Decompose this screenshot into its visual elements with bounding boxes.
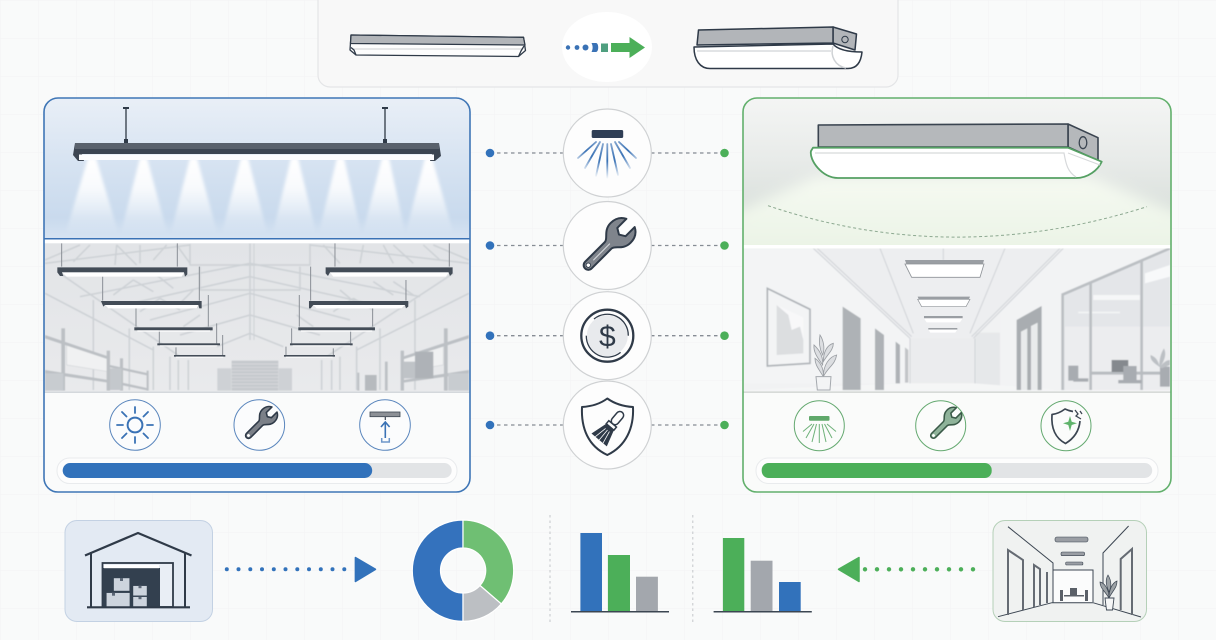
icon: shield with brush bbox=[563, 381, 651, 469]
chart: bars warehouse bbox=[571, 533, 669, 612]
icon: green wrench bbox=[916, 401, 966, 451]
icon: maintenance wrench bbox=[563, 202, 651, 290]
icon: wrench bbox=[234, 400, 285, 450]
illustration: warehouse fixtures bbox=[57, 243, 453, 358]
panel: left warehouse fixture bbox=[43, 98, 471, 493]
connector rows bbox=[486, 149, 729, 429]
arrow: warehouse to chart bbox=[225, 558, 376, 582]
progress bar: blue bbox=[57, 458, 457, 484]
icon: brightness sun bbox=[110, 400, 160, 450]
icon: transition arrow bbox=[562, 12, 652, 82]
icon: cost coin bbox=[563, 292, 651, 380]
icon: ceiling mount bbox=[360, 400, 410, 450]
icon: sparkling shield bbox=[1041, 401, 1091, 451]
icon: slim fixture bbox=[350, 35, 526, 56]
illustration: warehouse interior bbox=[43, 243, 471, 392]
icon: green light distribution bbox=[794, 401, 844, 451]
illustration: wide capsule fixture bbox=[744, 109, 1170, 245]
progress bar: green bbox=[756, 458, 1158, 484]
arrow: office to chart bbox=[838, 558, 975, 582]
panel: top fixture comparison bbox=[318, 0, 898, 87]
icon: light distribution bbox=[563, 109, 651, 197]
illustration: office corridor bbox=[743, 248, 1171, 391]
chart: donut bbox=[412, 520, 514, 621]
icon: cost coin: $ bbox=[599, 320, 616, 354]
illustration: linear fixture with light beams bbox=[44, 98, 470, 243]
panel footer: ratings bbox=[743, 391, 1171, 493]
icon: capsule fixture bbox=[694, 27, 862, 68]
tile: office corridor icon bbox=[993, 520, 1146, 622]
tile: warehouse icon bbox=[65, 520, 212, 622]
chart: bars office bbox=[714, 538, 812, 612]
panel footer: ratings bbox=[44, 391, 470, 493]
panel: right office fixture bbox=[723, 98, 1190, 493]
